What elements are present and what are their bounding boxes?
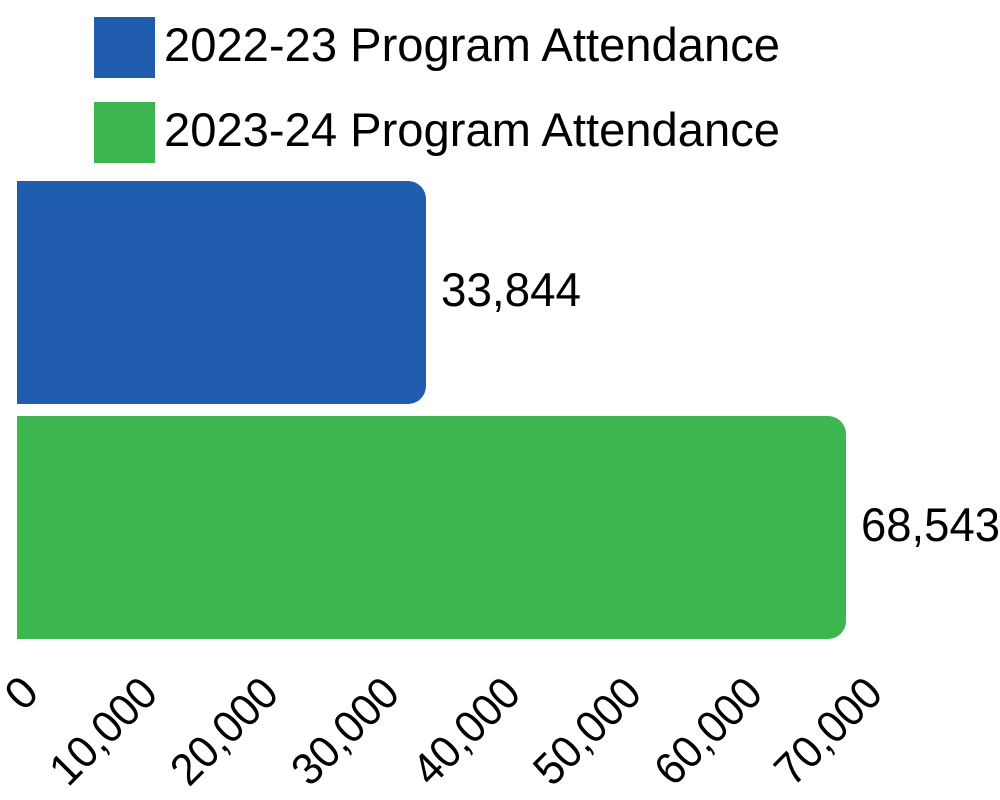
bar: 2023-24 attendance [17, 416, 846, 639]
legend swatch: 2023-24 [94, 102, 155, 163]
tick: 10,000: 10,000 [39, 667, 167, 795]
value label: 33,844: 33,844 [441, 263, 581, 316]
tick: 20,000: 20,000 [160, 667, 288, 795]
tick: 30,000: 30,000 [281, 667, 409, 795]
tick: 70,000: 70,000 [764, 667, 892, 795]
legend label: 2022-23: 2022-23 Program Attendance [164, 18, 780, 71]
legend swatch: 2022-23 [94, 17, 155, 78]
tick: 60,000: 60,000 [644, 667, 772, 795]
tick: 50,000: 50,000 [523, 667, 651, 795]
tick: 40,000: 40,000 [402, 667, 530, 795]
legend label: 2023-24: 2023-24 Program Attendance [164, 103, 780, 156]
bar: 2022-23 attendance [17, 181, 426, 404]
legend [94, 17, 780, 163]
x axis labels [0, 666, 892, 795]
